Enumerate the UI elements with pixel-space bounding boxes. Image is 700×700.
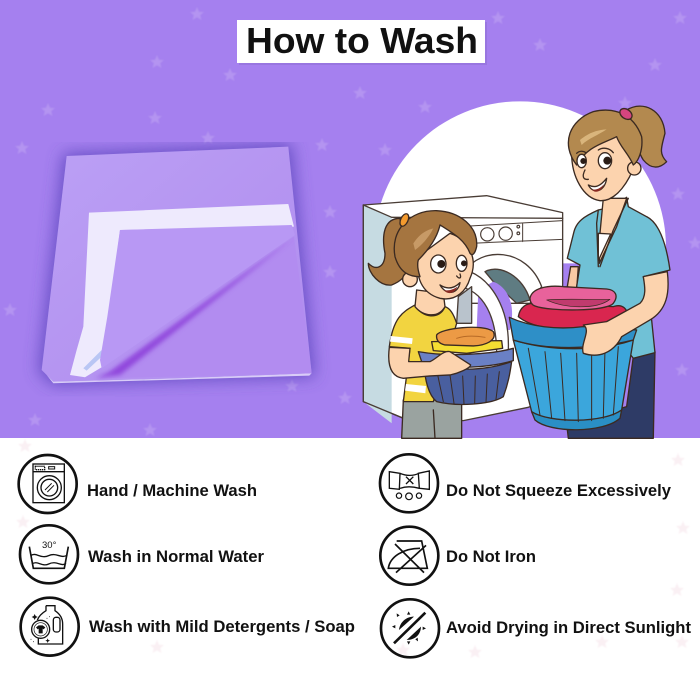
washing machine: [363, 196, 563, 423]
woman mouth: [588, 178, 607, 191]
label: do not iron: Do Not Iron: [446, 548, 536, 566]
child arm: [389, 347, 471, 378]
woman hair: [568, 110, 642, 165]
child face: [418, 233, 473, 299]
woman eyes: [598, 153, 612, 169]
icon: detergent bottle: [21, 598, 79, 656]
folded corner flap: [100, 225, 295, 368]
laundry illustration: [363, 101, 670, 438]
label: do not squeeze: Do Not Squeeze Excessively: [446, 482, 672, 500]
woman ponytail: [627, 106, 667, 167]
woman arm: [583, 272, 668, 355]
woman face: [572, 127, 637, 201]
care item: avoid direct sunlight: [381, 599, 692, 657]
pad lower right sheet: [100, 237, 312, 378]
fold shadow: [95, 237, 295, 378]
icon: wash tub 30 degrees: [20, 525, 78, 583]
washer door: [457, 254, 542, 353]
white waterproof underside: [70, 204, 294, 377]
child basket clothes: [432, 341, 503, 353]
background stars: [3, 7, 700, 436]
label: avoid direct sunlight: Avoid Drying in Direct Sunlight: [446, 619, 692, 637]
child mouth: [440, 283, 460, 292]
care item: mild detergents: [21, 598, 355, 656]
child basket: [423, 362, 512, 404]
child: [368, 211, 513, 438]
label: mild detergents: Wash with Mild Detergents / Soap: [89, 618, 355, 636]
child eyes: [431, 255, 446, 273]
child hair: [394, 211, 477, 277]
woman: [567, 106, 670, 438]
label: hand or machine wash: Hand / Machine Wash: [87, 482, 257, 500]
woman clothes basket: [509, 272, 668, 430]
purple background panel: [0, 0, 700, 438]
icon: twisted cloth crossed: [380, 454, 438, 512]
care item: do not iron: [380, 527, 536, 585]
child ponytail: [368, 218, 408, 285]
care item: hand or machine wash: [19, 455, 257, 513]
title box: [237, 20, 487, 65]
bottom white panel stars: [16, 439, 690, 658]
care item: normal water: [20, 525, 265, 583]
label: normal water: Wash in Normal Water: [88, 548, 265, 566]
blue crease on underside: [83, 350, 102, 371]
icon: sun crossed: [381, 599, 439, 657]
woman basket body: [513, 340, 633, 425]
white circle backdrop: [381, 101, 666, 264]
folded fleece pad: [38, 143, 315, 385]
icon label: 30 degrees: 30°: [42, 540, 57, 551]
title: How to Wash: [246, 20, 478, 61]
icon: iron crossed: [380, 527, 438, 585]
care item: do not squeeze: [380, 454, 672, 512]
washer knobs: [481, 225, 520, 241]
icon: washing machine: [19, 455, 77, 513]
